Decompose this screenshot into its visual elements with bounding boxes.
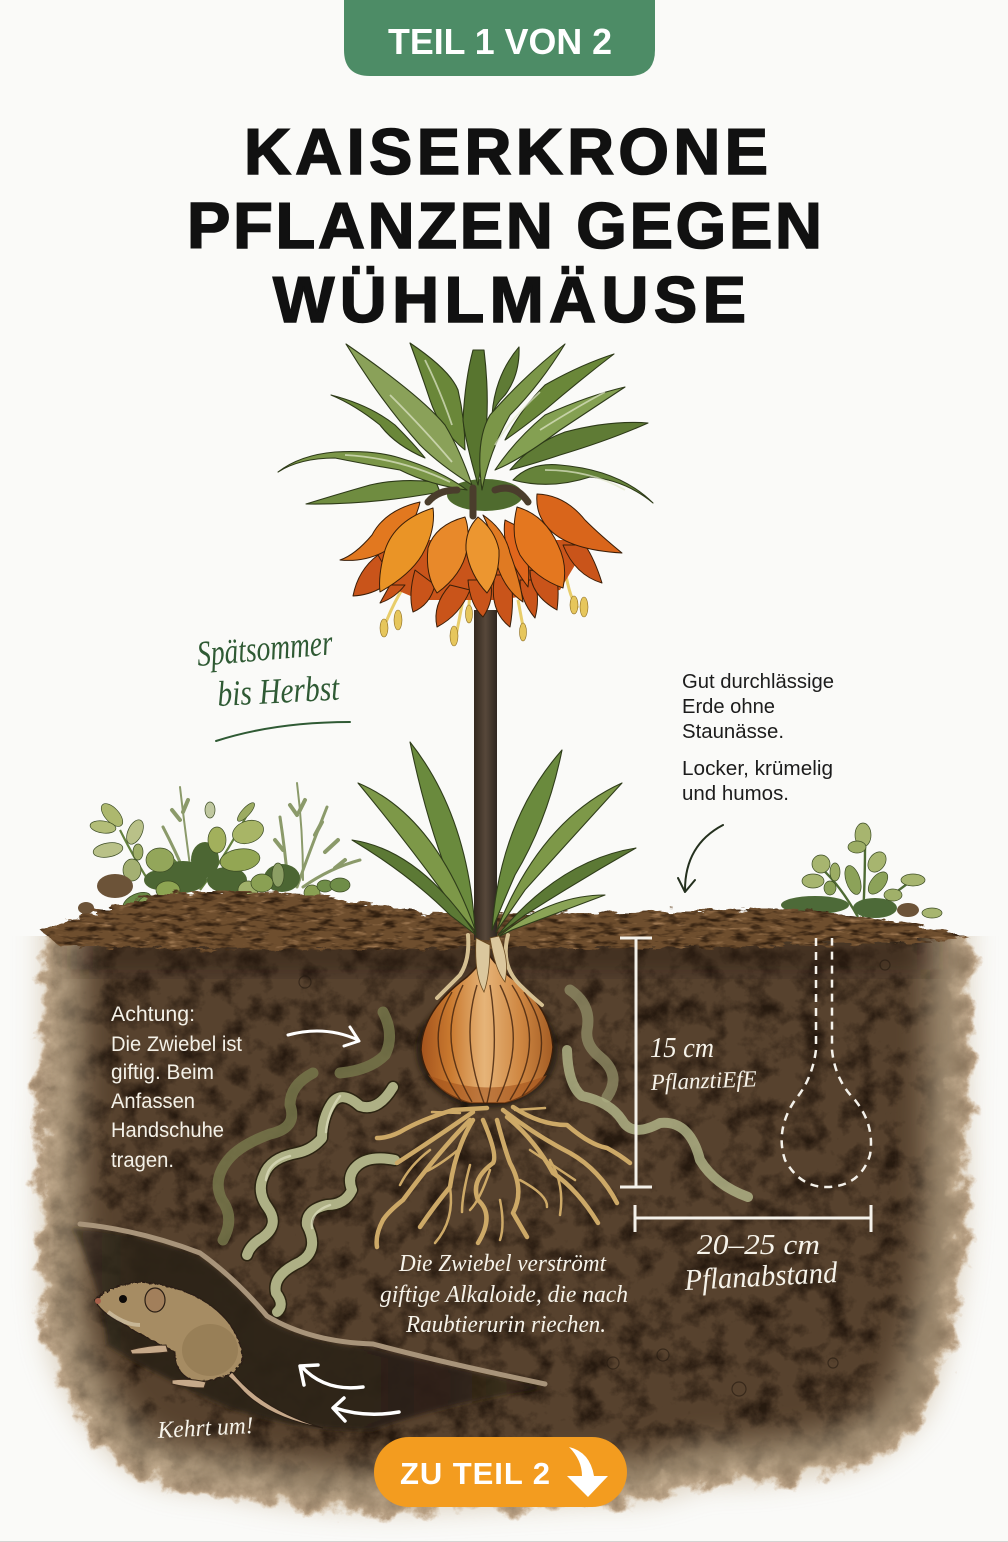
bulb shadow — [416, 992, 558, 1108]
crown pedicels — [428, 488, 528, 516]
surface litter band — [40, 892, 970, 950]
bulb neck scales — [476, 936, 507, 992]
button: to part 2 — [374, 1437, 627, 1507]
pale root trails in the soil — [218, 990, 748, 1312]
feet — [130, 1345, 206, 1388]
tail — [228, 1372, 323, 1428]
soil note: Gut durchlässige — [682, 671, 834, 693]
arrow: to bulb — [288, 1027, 359, 1046]
stamens — [386, 570, 578, 636]
vole tunnel — [72, 1224, 545, 1430]
soil note — [682, 671, 834, 805]
lower leaves — [352, 742, 636, 937]
eye — [119, 1295, 127, 1303]
title badge — [344, 0, 655, 76]
alkaloid note — [380, 1251, 628, 1338]
soil note: Erde ohne — [682, 696, 775, 718]
left ground plants — [89, 783, 360, 918]
leaves — [802, 823, 942, 918]
warning note: Die Zwiebel ist — [111, 1033, 242, 1056]
front petals — [340, 502, 420, 560]
spacing measure — [635, 1205, 871, 1297]
bulb body — [421, 950, 553, 1103]
soil body — [25, 936, 984, 1524]
warning note: giftig. Beim — [111, 1061, 214, 1084]
thin grassy sprigs — [163, 783, 360, 887]
ear — [145, 1288, 165, 1312]
dark leaf mass — [781, 896, 897, 918]
leaves — [89, 800, 350, 918]
stems — [821, 847, 913, 917]
icon: vole — [95, 1282, 323, 1428]
vole caption: Kehrt um! — [156, 1413, 254, 1444]
spacing caption: Pflanabstand — [683, 1256, 839, 1297]
green fill behind the flowers — [447, 479, 523, 511]
handwritten season note — [195, 622, 350, 741]
soil note: Staunässe. — [682, 721, 784, 743]
title — [187, 115, 822, 336]
dark leaf mass — [144, 842, 300, 893]
warning note: Handschuhe — [111, 1119, 224, 1142]
tunnel upper rim — [80, 1224, 545, 1384]
icon: curved arrow down — [567, 1447, 608, 1497]
alkaloid note: Die Zwiebel verströmt — [398, 1251, 607, 1277]
nose — [95, 1298, 101, 1304]
warning note: tragen. — [111, 1149, 174, 1172]
soil note: Locker, krümelig — [682, 758, 833, 780]
roots — [377, 1107, 630, 1247]
soil pebbles — [299, 960, 890, 1396]
tunnel void — [72, 1228, 545, 1430]
button text: ZU TEIL 2 — [400, 1456, 550, 1491]
crown leaves — [278, 343, 653, 511]
title: PFLANZEN GEGEN — [187, 189, 822, 262]
arrow: to soil surface — [678, 825, 723, 892]
warning note: Anfassen — [111, 1090, 195, 1113]
alkaloid note: Raubtierurin riechen. — [405, 1312, 606, 1338]
spacing label: 20–25 cm — [697, 1229, 820, 1261]
badge text: TEIL 1 VON 2 — [388, 21, 612, 62]
belly light — [108, 1312, 140, 1325]
dashed bulb outline — [782, 938, 871, 1187]
planting depth measure — [620, 938, 757, 1187]
bulb — [416, 935, 558, 1108]
body — [95, 1282, 243, 1382]
warning note: Achtung: — [111, 1003, 195, 1026]
title: WÜHLMÄUSE — [273, 263, 746, 336]
handwritten season note: bis Herbst — [216, 668, 341, 714]
back petals — [353, 540, 602, 627]
dark shadow under the surface — [80, 940, 930, 970]
handwritten season note: Spätsommer — [195, 622, 335, 674]
title: KAISERKRONE — [244, 115, 768, 188]
right ground plants — [781, 823, 942, 918]
bright trails — [247, 1087, 395, 1312]
pale watercolor fade at the soil edge — [62, 900, 948, 1490]
stems — [120, 803, 253, 890]
bulb neck strands — [437, 935, 542, 1005]
bulb ribs — [438, 985, 542, 1103]
stem — [474, 610, 497, 940]
arrows: turning back — [300, 1365, 399, 1421]
flower crown — [340, 488, 622, 646]
depth caption: PflanztiEfE — [649, 1066, 757, 1095]
depth label: 15 cm — [650, 1032, 714, 1064]
faded trails — [218, 990, 613, 1240]
rump shade — [182, 1324, 238, 1376]
bulb lower warm shade — [428, 1075, 547, 1103]
soil stones — [78, 874, 919, 917]
soil note: und humos. — [682, 783, 789, 805]
panel: soil cross-section — [39, 840, 972, 1514]
alkaloid note: giftige Alkaloide, die nach — [380, 1282, 628, 1308]
warning note — [111, 1003, 242, 1172]
